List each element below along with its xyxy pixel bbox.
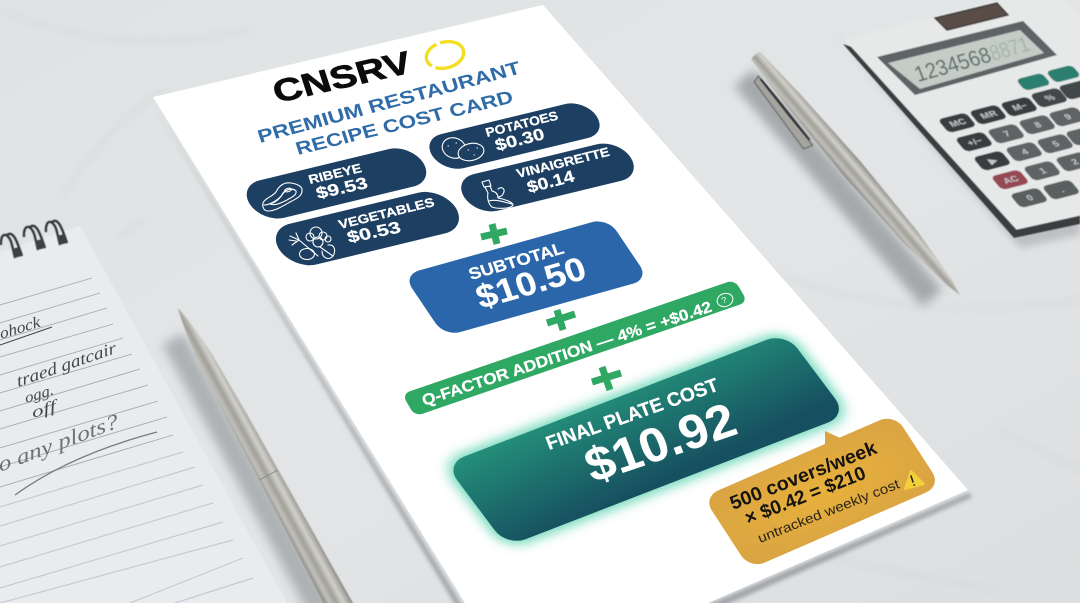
pill: ribeye: $9.53 bbox=[314, 174, 370, 203]
handwritten notes bbox=[0, 313, 157, 495]
pill: potatoes: $0.30 bbox=[493, 125, 547, 155]
keypad: MC bbox=[947, 117, 969, 129]
amber callout: 500 covers/week bbox=[727, 437, 880, 515]
yellow ring bbox=[423, 38, 467, 72]
pen: upper right bbox=[728, 48, 969, 319]
keypad: ▶ bbox=[985, 156, 1002, 167]
title: RECIPE COST CARD bbox=[293, 86, 516, 159]
title bbox=[255, 57, 524, 159]
paper card shadow bbox=[151, 100, 972, 603]
paper card bbox=[153, 5, 968, 603]
final plate cost box: $10.92 bbox=[578, 394, 744, 493]
handwritten notes: off bbox=[30, 397, 61, 422]
keypad: 9 bbox=[1062, 112, 1075, 122]
wordmark: CNSRV bbox=[268, 45, 416, 110]
keypad: MR bbox=[978, 109, 1000, 121]
subtotal box: SUBTOTAL bbox=[466, 239, 567, 284]
title: PREMIUM RESTAURANT bbox=[255, 57, 524, 147]
keypad: 4 bbox=[1019, 147, 1032, 157]
amber callout bbox=[703, 414, 941, 569]
keypad: % bbox=[1043, 93, 1058, 104]
icon: potatoes bbox=[439, 134, 485, 163]
keypad: . bbox=[1057, 186, 1067, 195]
plus sign 1 bbox=[481, 224, 507, 244]
plus sign 3 bbox=[592, 367, 621, 390]
spiral binding rings bbox=[1, 221, 67, 258]
pill: ribeye bbox=[238, 144, 435, 223]
logo bbox=[268, 38, 467, 110]
q-factor bar: Q-FACTOR ADDITION — 4% = +$0.42 bbox=[420, 299, 714, 410]
icon: steak bbox=[263, 183, 302, 211]
keypad: M− bbox=[1010, 101, 1031, 113]
keypad: 0 bbox=[1024, 194, 1036, 203]
pen body bbox=[747, 48, 969, 302]
pill text: VEGETABLES bbox=[337, 194, 437, 232]
amber callout: untracked weekly cost bbox=[756, 477, 902, 546]
display: 8871 bbox=[986, 32, 1033, 66]
display: 1234568 bbox=[911, 43, 995, 87]
icon: warning bbox=[905, 471, 924, 489]
plus sign 2 bbox=[547, 310, 575, 330]
keypad: 1 bbox=[1037, 166, 1050, 176]
keypad: 7 bbox=[1001, 130, 1013, 139]
final plate cost box bbox=[445, 333, 847, 546]
pill: vegetables bbox=[266, 187, 469, 270]
pill: vinaigrette bbox=[452, 139, 643, 216]
pill text: RIBEYE bbox=[307, 160, 364, 187]
help icon: ? bbox=[720, 295, 728, 306]
pill: vegetables: $0.53 bbox=[345, 218, 403, 247]
keypad bbox=[938, 65, 1080, 208]
subtotal box bbox=[403, 218, 649, 336]
display bbox=[877, 21, 1057, 95]
pill: vinaigrette: $0.14 bbox=[525, 167, 577, 197]
keypad: +/− bbox=[965, 136, 986, 148]
keypad: 8 bbox=[1032, 120, 1045, 130]
icon: vegetables bbox=[289, 227, 335, 260]
pill text: POTATOES bbox=[484, 108, 560, 140]
keypad: 5 bbox=[1050, 139, 1063, 149]
amber callout: × $0.42 = $210 bbox=[742, 462, 869, 530]
subtotal box: $10.50 bbox=[471, 251, 591, 316]
solar panel bbox=[935, 3, 1008, 30]
pill text: VINAIGRETTE bbox=[515, 144, 612, 181]
pen clip bbox=[748, 76, 815, 151]
notepad with handwriting bbox=[0, 221, 287, 603]
pen: lower left bbox=[151, 302, 354, 603]
q-factor bar bbox=[402, 280, 748, 416]
final plate cost box: FINAL PLATE COST bbox=[543, 375, 722, 455]
help icon bbox=[715, 291, 735, 309]
handwritten notes: traed gatcair bbox=[15, 338, 118, 391]
calculator bbox=[838, 0, 1080, 248]
handwritten notes: ogg. bbox=[24, 382, 55, 407]
icon: bottle bbox=[482, 180, 513, 208]
keypad: AC bbox=[1001, 174, 1022, 186]
pill: potatoes bbox=[421, 99, 608, 173]
